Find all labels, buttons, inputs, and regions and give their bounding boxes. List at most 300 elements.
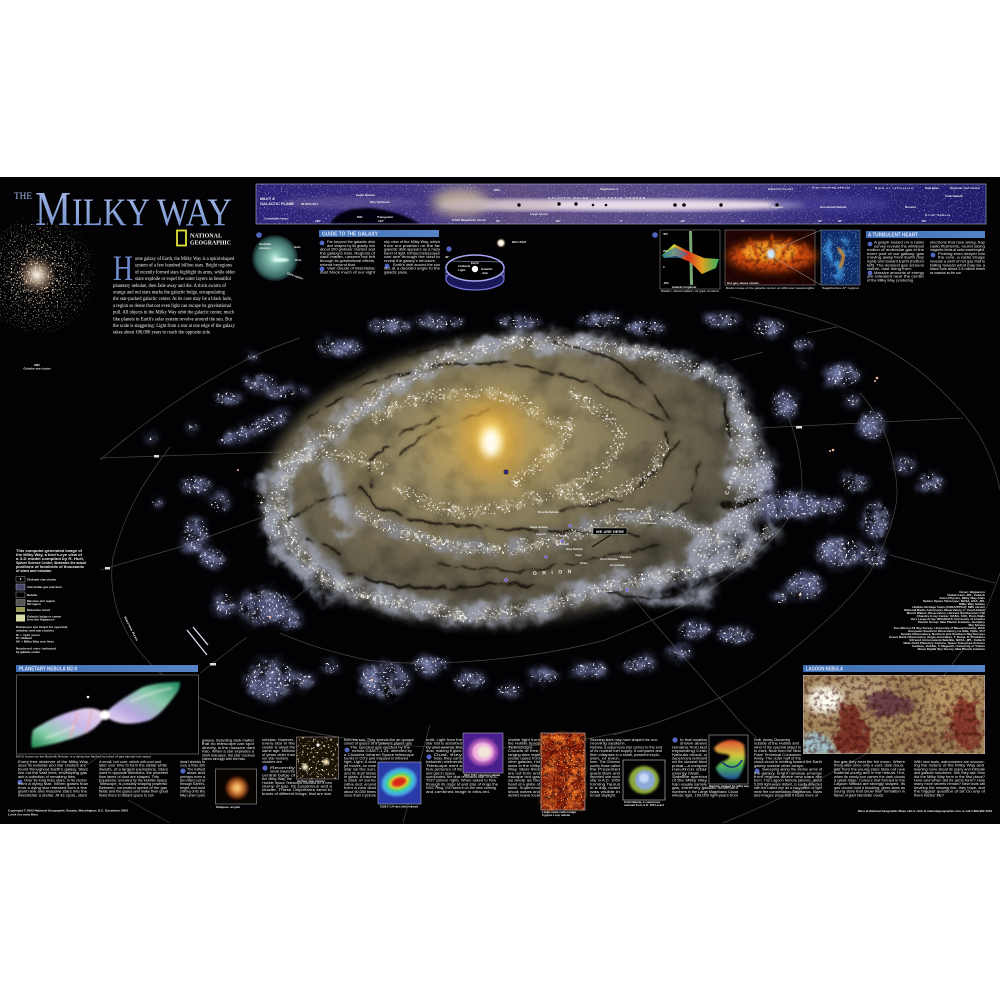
credits: Two Micron All Sky Survey, University of Massachusetts, IPAC [894,626,986,630]
bottom column 9 [672,737,738,798]
bottom column 11: Lagoon Nebula are strongly shaped. Its [834,782,905,786]
panorama labels: MILKY & [260,197,275,201]
bottom column 3: shining of its tiny [180,790,205,794]
dark foreground cloud [330,208,420,224]
solar neighbourhood labels: Vega [575,553,582,557]
title: ILKY [72,191,150,234]
guide text columns: galactic plane. [384,270,408,274]
photo: black hole region [821,230,860,290]
bottom column 3: halo. When a star explodes a [202,750,255,754]
bottom column 11: flames of giant interstellar clouds. [834,793,884,797]
side-view galaxy sphere diagram: clusters [259,246,271,250]
bottom column 8: the Presented [590,768,620,772]
side-view galaxy sphere diagram [252,232,304,281]
panorama labels: Large Cloud [530,212,548,216]
legend labels: Globular star cluster [27,578,57,582]
bottom column 3: Milky Lyman Cycles [180,793,205,797]
legend labels: M = light years [16,633,40,637]
Earth orbit inclination diagram: disk [482,271,488,275]
bottom column 8: then collapses in a small, powerful explo- [590,753,661,757]
inset photo: red giant star [216,769,256,809]
order line: More at National Geographic Maps call or click at nationalgeographic.com or call 1-800-962-1643 [858,809,992,813]
bottom column 11 [833,760,905,797]
bottom column 8: forming Taurus [590,782,620,786]
bottom column 6: star lost is absorbed [426,742,462,746]
panorama labels: Sagittarius A [600,187,619,191]
bottom column 10 [754,738,823,798]
legend intro: a 3-D model compiled by R. Hurt, [16,557,84,561]
solar neighbourhood labels: Orion Nebula [600,557,618,561]
outer ring labels and tick marks [105,426,802,666]
bottom column 5: form a new dust [344,786,376,790]
bottom column 12: the biggest question of all: Do any of [914,790,986,794]
panorama labels: Eagle Nebula [356,193,375,197]
solar neighbourhood labels: Sirius [580,561,588,565]
bottom column 1: interstellar a stellar. At its cycle, stars [18,793,87,797]
solar neighbourhood labels: Ring Arc [605,417,617,421]
bottom column 7: stars in the Milky [508,764,540,768]
legend labels: Interstellar gas and dust [27,585,62,589]
National Geographic logo: GEOGRAPHIC [190,240,231,246]
bottom column 4: nebulas. However, [262,738,294,742]
turbulent heart text columns: as massive as the sun. [930,271,962,275]
guide text columns: from our position on the far [384,244,441,248]
inset chart: spiral velocity map: Neutrino mapped for milky way [709,784,749,788]
inset chart: thermal dust image: G328.7-1.24 dust shell, infrared [380,804,418,808]
title: M [35,181,71,236]
arm names [360,461,741,610]
bottom column 10: the galaxy, bright nebulae emerge [754,771,822,775]
bottom column 8: star in A.D. 1054 [590,779,620,783]
panorama labels: Horsehead Nebula [820,205,847,209]
inset photo: crab nebula [623,760,665,807]
credits: Hubble Heritage Team (AURA/STScI): M80 cluster [912,605,986,609]
panorama labels: Crab Nebula [945,194,963,198]
bottom column 7: other galaxies. Hot [508,760,540,764]
side-view galaxy sphere diagram: Globular [259,242,272,246]
bottom column 7: as lively as the [508,779,540,783]
arm names: PERSEUS [360,593,405,610]
bottom column 9: numbers in the Large Magellanic Cloud [672,790,738,794]
side-view galaxy sphere diagram: Halo [294,245,301,249]
outer ring labels and tick marks: Norma Arm [123,616,139,642]
panorama labels: GALACTIC PLANE [260,202,295,206]
title [14,181,232,236]
intro text block: ome galaxy of Earth, the Milky Way is a spiral-shaped [135,255,234,262]
credits: Very Large Array: NRAO/AUI, University of Arizona [911,617,985,621]
legend labels: Nebula [27,593,37,597]
turbulent heart text columns: electrons that race along, trap [930,240,985,244]
bottom column 2: dwarfs, of a largest explosions. Stars [99,767,168,771]
bottom column 1: found throughout Earth's galaxy. Stars [18,767,88,771]
bottom column 3: bright and bold [180,786,205,790]
bottom column 6: help, they carry [434,756,462,760]
bottom column 10: and images show that it hosts more of [754,794,819,798]
nebula markers [504,525,629,592]
inset photo: supernova red field: Large-scale radio image [542,810,576,814]
panorama labels: M31 [357,215,363,219]
panorama labels: Dark or reflection [875,186,913,190]
credits: Spitzer Space Telescope: NASA, ESA, JPL [923,599,985,603]
bottom column 9: shown above [680,742,707,746]
bottom column 11: jets from the young stars blow out new [833,767,905,771]
bottom column 7: create oases from [508,756,540,760]
title: THE [14,192,32,202]
guide text columns: and shaped by its gravity lurk [327,244,375,248]
bottom column 12: did the Milky Way form in the first place? [914,775,985,779]
bottom column 3: through Earth's, [180,782,205,786]
legend intro [16,549,86,573]
bottom column 8: was visible in [590,790,620,794]
bottom column 10: outside of the Hubble and [754,742,799,746]
bottom column 6: and gas in space. [426,771,456,775]
bottom column 11: gas clouds hold it blocking, gives stars as [834,786,905,790]
chart: radial velocity map [652,230,720,293]
Earth orbit inclination diagram: Galactic [481,267,493,271]
bottom column 4: of years older than [262,753,295,757]
bottom column 6 [426,738,498,794]
bottom column 8: moving system. [590,742,626,746]
turbulent heart text columns: motion of molecular gas in the [867,248,924,252]
bottom column 7: are not from and [508,771,540,775]
bottom column 6: and combined image in infra-red. [426,790,490,794]
bottom column 2 [99,760,168,797]
arm names: CRUX [642,461,664,481]
legend swatches [16,576,25,622]
bottom column 7: shock waves and [508,790,540,794]
turbulent heart text columns: of the Milky Way, producing [867,278,913,282]
intro text block: the scale is staggering: Light from a star at one edge of the galaxy [113,322,235,329]
inset photo: supernova red field: Cygnus Loop nebula [542,813,570,817]
credits: Gemini Observatory, Northern and Southern Sky Surveys [901,632,985,636]
legend intro: Spitzer Science Center, illustrates the actual [16,561,86,565]
globular cluster photo [0,213,99,370]
legend labels: Galactic bulge or center [27,614,62,618]
bottom column 2: Telescope, is possibly shaping powerful [99,782,167,786]
turbulent heart text columns: visible, dust rising from. [867,267,912,271]
bottom column 6: NGC Ring. ISO sees it on the new coming [426,786,496,790]
bottom column 9: energy blast. [672,771,700,775]
legend labels: Distances are listed for spectral, [16,625,68,629]
bottom column 4 [262,738,333,796]
legend intro: This computer-generated image of [16,549,83,553]
panorama labels: 60° [922,219,927,223]
legend intro: of stars and nebulae. [16,569,52,573]
guide text columns: the galaxy's halo. Regions of [320,251,376,255]
bottom column 10: born. The Lagoon Nebula (above), about [754,779,822,783]
intro text block: stars explode or expel the outer layers as beautiful [135,275,231,282]
heading: a turbulent heart: A TURBULENT HEART [868,232,919,238]
bottom column 10: wind of the spectral object to [754,745,801,749]
credits: Planck Group: Max Planck Institute, Germany [918,620,985,624]
bottom column 3: directly, is the massive dark [202,746,255,750]
bottom column 10: from regions where new stars are [754,775,822,779]
copyright line: Copyright © 2003 National Geographic Society, Washington, D.C. December 2003 [8,808,128,812]
bottom column 10: Sweeping along the dense arms of [762,768,823,772]
guide text columns: lies at a decided angle to the [384,267,440,271]
turbulent heart text columns: Massive amounts of energy [874,271,924,275]
panorama labels: IN OUR SKY [301,202,319,206]
band star speckle [256,184,986,224]
guide text columns: reveal the galaxy's structure. [384,259,436,263]
legend labels: HII = Milky Way arm lines [16,640,54,644]
inset photo: purple nebula: NGC 7027, planetary nebula [464,773,500,777]
bottom column 8: sion, or even. [590,756,620,760]
bottom column 6: surrounded, the dust remnants star of NGC [426,775,498,779]
panorama labels: Globular star cluster [950,186,981,190]
panorama labels: Triangulum [377,215,394,219]
legend labels: by galactic center [16,650,41,654]
Earth orbit inclination diagram [445,238,527,290]
bottom column 9: pulsar—a compact [672,764,707,768]
photo: galactic center heart: Hot gas, dense clouds [727,281,759,285]
credits: National Radio Astronomy Observatory, F. Yusef-Zadeh [904,608,985,612]
bottom column 4: clouds toward the [270,770,295,774]
star-forming region glows [277,343,770,617]
intro text block: the star-packed galactic center. At its core may lie a black hole, [113,296,232,302]
panorama labels: 120° [378,219,385,223]
bottom column 5: a stab of some [344,779,376,783]
turbulent heart text columns: A graph based on a radio [874,240,924,244]
bottom column 5: nebula G328.7-1.24, detected by [352,749,412,753]
bottom column 9: expanding Crab [672,749,707,753]
bottom column 7: stars. Supernova [508,786,541,790]
bottom column 1: giant new and massive stars into the [18,790,87,794]
bottom column 4: our star-nursery [262,756,288,760]
bottom column 3: galaxy, including dark matter [202,738,255,742]
bottom column 6: few pictures of its [426,768,462,772]
callout: we are here: WE ARE HERE [596,530,624,534]
inset chart: spiral velocity map [709,735,749,788]
bottom column 1: Over its long lives stars, in its center [24,778,88,782]
bottom column 8: broad daylight. [590,794,616,798]
bottom column 7: debris leave local [508,794,540,798]
arm names: ORION [533,569,577,577]
inset photo: crab nebula: remnant from A.D. 1054 event [624,803,664,807]
panorama labels [260,186,981,223]
bottom column 12: them harbor life? [914,793,944,797]
broad dust shading [290,340,757,600]
credits: Green Bank Observatory, Anglo-Australian, T. Dame, P. Thaddeus [889,635,985,639]
bottom column 4: cluster is about the [262,745,295,749]
bottom column 9: gas, extremely galactic movement [672,786,738,790]
bottom column 8: Stunning stars may have shaped the sun- [590,738,659,742]
scattered star clusters along arms [270,343,770,617]
National Geographic logo [177,230,231,246]
bottom column 12: develop the missing link, they hope, and [914,786,985,790]
bottom column 12: many more secrets remain? New tools will [914,782,985,786]
arm names: CARINA [724,464,741,496]
guide text columns: about 200 globular clusters and [320,248,375,252]
panorama labels: 60° [496,219,501,223]
solar neighbourhood labels [520,417,657,593]
credits [889,590,986,651]
bottom column 7: Clouds of free- [508,749,541,753]
star-forming region points [277,343,770,617]
chart: radial velocity map: 200 [663,249,668,253]
intro text block: a region so dense that not even light can escape its gravitational [113,303,231,309]
side-view galaxy sphere diagram: Dark matter [287,271,304,281]
bottom column 2: flow lanes of dust are shaped. This [99,775,159,779]
legend intro: positions of hundreds of thousands [16,565,84,569]
inset photo: star cluster [296,737,338,783]
bottom column 9: In that location [680,738,707,742]
solar neighbourhood labels: Dumbbell [556,542,569,546]
bottom column 10: to mark. Near from the Near [754,749,802,753]
bottom column 6: by and warms the [426,745,462,749]
bottom column 8: form. The Chinese [590,760,620,764]
side-view galaxy sphere diagram: Disk [295,258,302,262]
credits: Sloan Digital Sky Survey, Max Planck Institute [917,647,985,651]
galactic center marker [504,470,508,474]
dust lanes [290,340,757,600]
credits: Robert Hurt, JPL, Caltech [948,593,985,597]
bottom column 12: How and when did its arms form? How [914,778,985,782]
legend intro: the Milky Way, a bird's-eye view of [16,553,83,557]
bottom column 2: used in opposite directions, the pinwheel [99,771,168,775]
bottom column 5: star as the sun, [344,768,376,772]
intro text block: planetary nebulae, then fade away and die. A thick swarm of [113,282,226,289]
bottom column 3: star orbiters such as [180,778,205,782]
solar neighbourhood labels: M17 [520,537,526,541]
intro text block: H [113,248,133,288]
bottom column 5: jet moves, so near [343,764,377,768]
chart: radial velocity map: Galactic longitude [672,285,697,289]
dark mottling on disk [250,315,774,645]
turbulent heart text columns: inner part of our galaxy, gas [867,252,924,256]
intro text block: orange and red stars marks the galactic bulge, encapsulating [113,290,225,296]
photo: black hole region: Sagittarius A* region [822,286,859,290]
bottom column 5: in glass. A trauma [344,775,377,779]
dark nebula spots [517,202,779,207]
bottom column 10: Array. The outer half of the [754,756,801,760]
panorama labels: Rosette [905,205,916,209]
bottom column 7: ranging stars might [508,753,540,757]
heading: planetary nebula [16,665,198,672]
bottom column 5: light. Light: A dust [344,760,376,764]
turbulent heart text columns: moving away from Earth (top [867,256,924,260]
bottom column 4: clump of gas. Its suspicious and a [262,784,333,788]
credits: Milky Way Galaxy [959,602,985,606]
bottom column 1 [18,760,88,797]
callout: we are here [592,528,627,547]
Earth orbit inclination diagram: NGC 6397 [512,240,527,244]
bottom column 3 [180,738,255,797]
bottom column 1: sees its nebulae and star clusters are [18,764,86,768]
solar neighbourhood labels: Ring Nebula [566,547,583,551]
bottom column 4: clusters are [262,760,282,764]
bottom column 6: Dust, they [434,753,462,757]
credits: Infrared Astronomical Satellite, NASA, JPL, Caltech [909,638,985,642]
credits: Chandra X-ray Center: NASA, CXC, Penn State [917,614,985,618]
bottom column 4: Hubble Space Telescope focused on a new [262,781,332,785]
bottom column 3: dwarf shrinks to [180,760,205,764]
panorama labels: 0° [620,219,624,223]
guide text columns: dark matter, unseen but felt [320,255,375,259]
turbulent heart text columns: radio filaments, round along [930,244,985,248]
heading: guide to the galaxy: GUIDE TO THE GALAXY [322,232,378,238]
bottom column 6: between elements [426,760,462,764]
cluster caption [23,363,52,370]
bottom column 4: same age. Millions [262,749,295,753]
bottom column 8: Nebula, a supernova star comes to the end [590,745,662,749]
bottom column 3: The hottest [187,767,205,771]
panorama labels: Rho Ophiuchi [370,200,390,204]
bottom column 11: material young and in the nebula. Hot, [834,771,905,775]
panorama labels: -60° [740,219,746,223]
intro text block: pull. All objects in the Milky Way orbit the galactic center, much [113,310,234,316]
reddish star-forming points [237,377,878,681]
bottom column 11: young stars that show their formation in [834,790,905,794]
bottom column 12: With new tools, astronomers are uncover- [914,760,986,764]
chart: radial velocity map: 0 [663,265,665,269]
bottom column 11: a great ridge. Colours that formed in the [834,778,905,782]
grey-white cloud bands [270,343,770,617]
bottom column 4: cluster. These Objectives send to [262,788,332,792]
inset photo: purple nebula [463,733,503,777]
guide text columns: dust block much of our night [320,270,375,274]
intro text block [113,248,235,336]
bottom column 4: every star in the [262,742,295,746]
cluster caption: M80 [34,363,40,367]
credits: Cover: Hipparcos [959,590,985,594]
legend labels: Molecular cloud [27,608,50,612]
chart: radial velocity map: 400 [663,232,668,236]
legend labels [16,578,68,654]
solar neighbourhood labels: Cone Nebula [618,507,636,511]
guide text columns: band of light. Infrared telescopes [384,251,440,255]
intro text block: takes about 100,000 years to reach the opposite side. [113,330,211,336]
bottom column 8 [590,738,662,798]
legend labels: HII region [27,602,41,606]
bottom column 9: remains from last [672,745,707,749]
bottom column 3: that no telescope can spot [202,742,254,746]
bottom column 8: guest stars and [590,771,620,775]
bottom column 3: cool, a final, dim [180,764,205,768]
guide text columns: can see through the dust to [384,255,440,259]
solar neighbourhood labels: Pleiades [620,555,632,559]
panorama labels: GALACTIC CENTER [597,196,646,200]
bottom column 8: poetry those called [590,764,620,768]
legend labels: Numbered stars indicated [16,646,56,650]
bottom column 9: Nebula cloud, a [672,753,708,757]
Earth orbit inclination diagram: 30° [445,255,450,259]
bottom column 7: the Hubble Space [508,742,540,746]
bottom column 9: supernova remnant [672,756,707,760]
bottom column 5: cloud of gases at a galaxy's planet gas [344,742,412,746]
galactic coordinate grid [87,297,1000,823]
bottom column 5: The spectral gas ejected by the [350,745,410,749]
heading: lagoon nebula [803,665,985,672]
bottom column 7: visible light from [508,738,540,742]
cluster caption: Globular star cluster [23,366,52,370]
arm names: SAGITTARIUS [400,529,471,550]
inset photo: crab nebula: Crab Nebula, a supernova [624,800,660,804]
panorama labels: 180° [315,219,322,223]
inset photo: supernova red field [541,733,585,817]
heading: planetary nebula: PLANETARY NEBULA M2-9 [19,666,77,672]
panorama labels: 30° [556,219,561,223]
bottom column 6: dust, making it glow. [426,749,462,753]
bottom column 1: and a collection of remaining fires. [18,775,76,779]
chart: radial velocity map: -200 [663,281,669,285]
Earth orbit inclination diagram: Light [458,268,465,272]
photo: planetary nebula M2-9 [16,675,198,758]
intro text block: system of a few hundred billion stars. Bright regions [135,262,232,269]
bottom column 1: from a dying star released from a few [18,786,87,790]
credits: Astro-Physics, Milky Way Atlas [939,596,985,600]
bottom column 7: Telescope. [508,745,534,749]
